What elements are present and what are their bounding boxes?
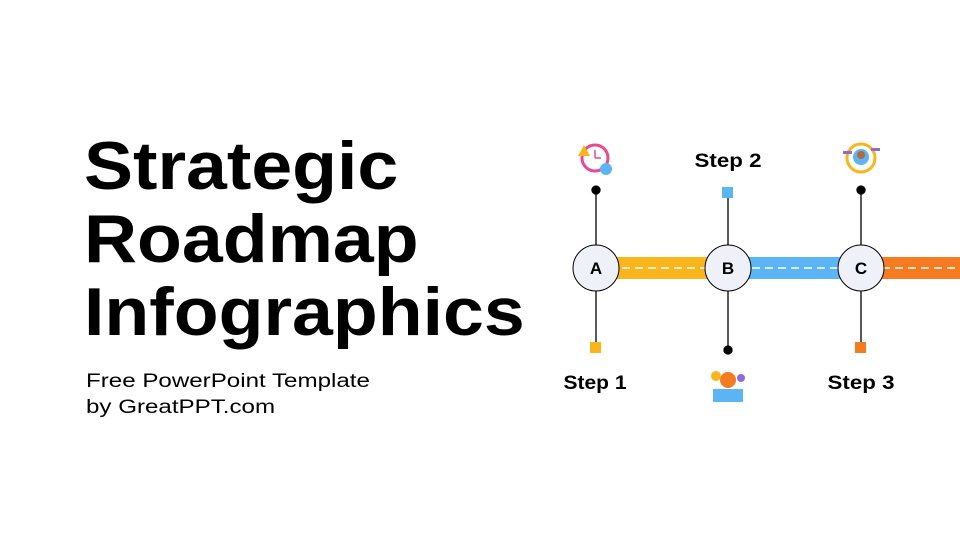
step labels: Step 2 (694, 151, 762, 172)
icon: clock (578, 145, 612, 175)
icon: person avatar (843, 144, 880, 172)
bar segments (596, 257, 960, 279)
title (84, 128, 525, 350)
icon: person with ideas (711, 371, 745, 402)
nodes A B C: A (590, 259, 602, 278)
title: Infographics (84, 274, 525, 350)
subtitle (86, 371, 370, 418)
step labels: Step 3 (828, 373, 894, 394)
nodes A B C: B (722, 259, 734, 278)
title: Strategic (84, 128, 398, 204)
subtitle: Free PowerPoint Template (86, 371, 370, 392)
step labels (564, 151, 894, 394)
subtitle: by GreatPPT.com (86, 397, 275, 418)
nodes A B C: C (855, 259, 867, 278)
title: Roadmap (84, 201, 419, 277)
connectors (592, 186, 865, 354)
nodes A B C (573, 245, 884, 291)
markers (590, 187, 866, 353)
step labels: Step 1 (564, 373, 627, 394)
